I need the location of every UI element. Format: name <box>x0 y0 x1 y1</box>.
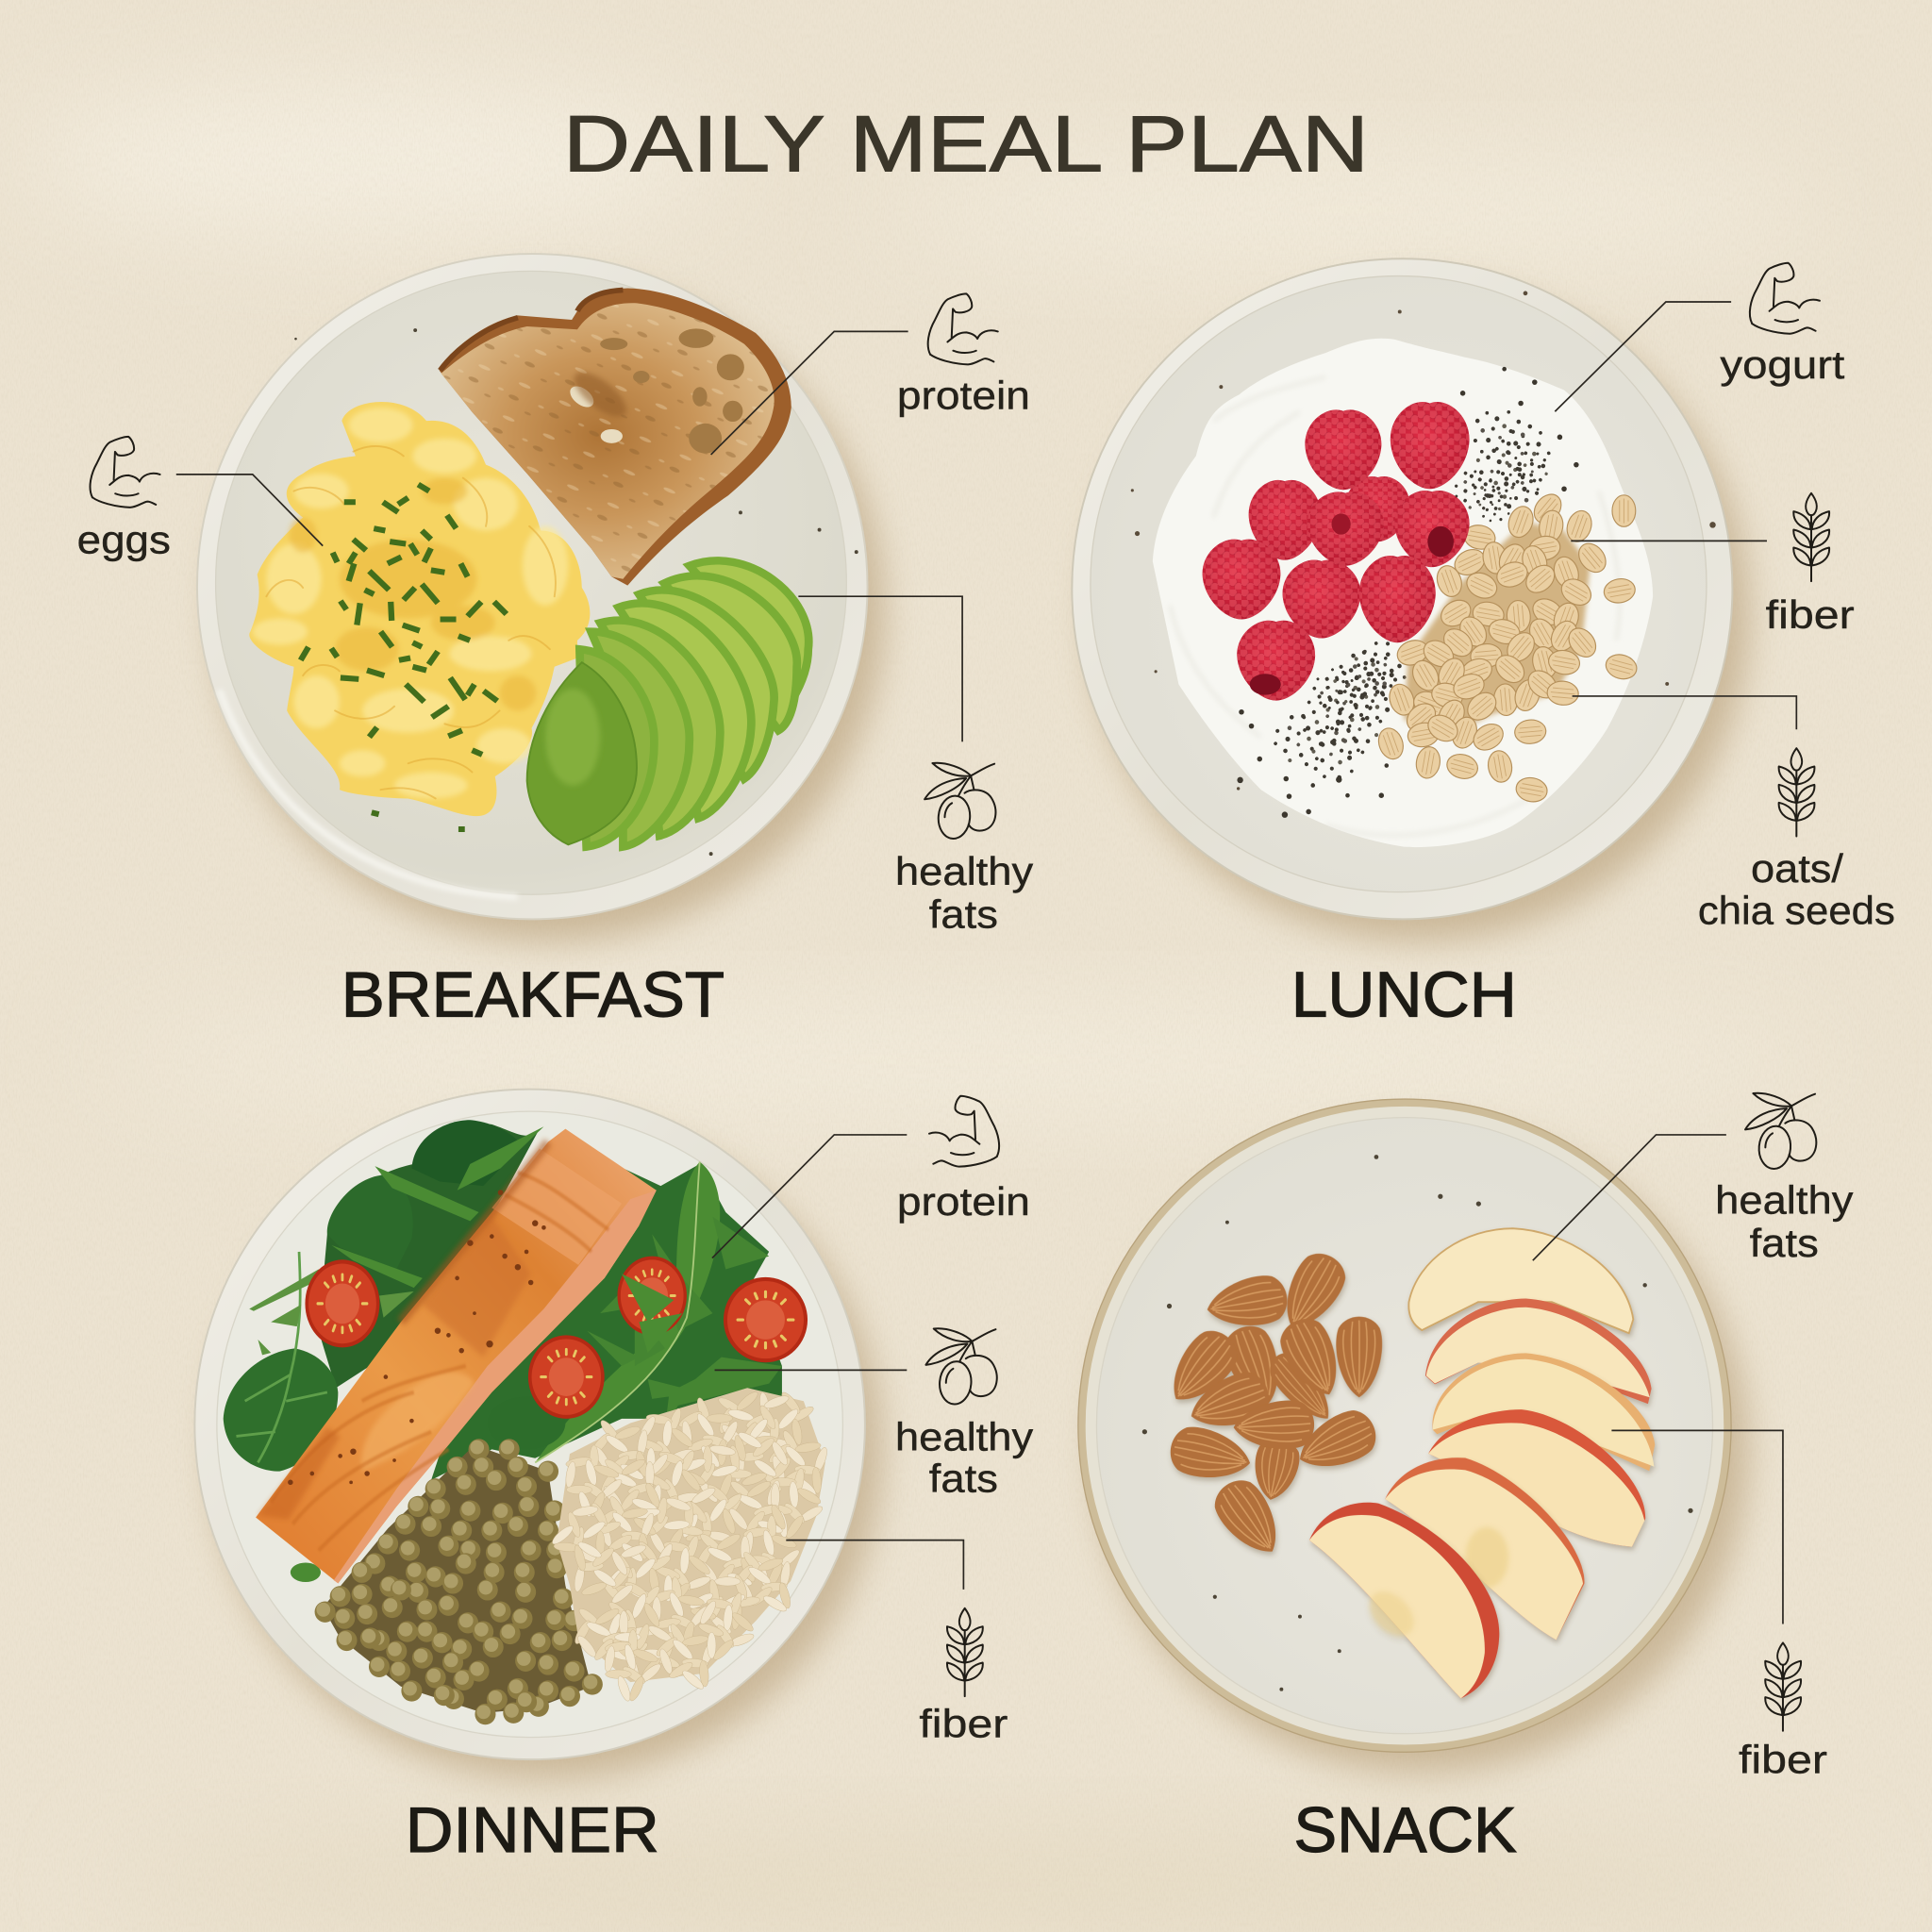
icon: muscle <box>91 437 160 508</box>
plate: dinner <box>194 1090 882 1779</box>
callout: eggs <box>77 437 323 561</box>
label: eggs <box>77 517 171 561</box>
leader line <box>1555 302 1731 411</box>
callout: oats and chia seeds <box>1573 696 1895 933</box>
plate: lunch <box>1072 258 1750 941</box>
label: fats <box>929 1457 998 1501</box>
callout: healthy fats <box>798 596 1033 937</box>
panel: dinner <box>194 1090 1033 1866</box>
food: apple slices <box>1309 1228 1655 1698</box>
leader line <box>715 1369 907 1371</box>
label: healthy <box>895 849 1033 893</box>
icon: olives <box>925 1328 997 1406</box>
food: yogurt <box>1153 339 1653 847</box>
food: scrambled eggs <box>249 402 590 829</box>
panel: breakfast <box>77 254 1033 1031</box>
callout: fiber <box>1571 493 1855 637</box>
icon: muscle <box>929 1096 999 1167</box>
icon: wheat <box>1765 1642 1801 1731</box>
icon: olives <box>924 763 995 840</box>
label: healthy <box>1715 1178 1854 1223</box>
callout: protein <box>712 1096 1030 1258</box>
heading: snack: SNACK <box>1293 1795 1517 1866</box>
label: fiber <box>919 1702 1008 1746</box>
label: chia seeds <box>1698 889 1895 933</box>
food: salad greens <box>224 1120 782 1582</box>
food: raspberries <box>1203 402 1470 701</box>
food: salmon fillet <box>256 1129 657 1583</box>
label: yogurt <box>1720 342 1845 387</box>
plate: snack <box>1078 1099 1748 1774</box>
label: fats <box>1750 1221 1819 1265</box>
food: almonds <box>1158 1245 1383 1565</box>
leader line <box>1573 696 1796 729</box>
callout: healthy fats <box>715 1328 1033 1501</box>
callout: healthy fats <box>1533 1093 1854 1265</box>
leader line <box>712 1135 907 1258</box>
label: fiber <box>1739 1738 1827 1782</box>
leader line <box>711 331 908 455</box>
icon: wheat <box>947 1608 983 1696</box>
label: fats <box>929 892 998 937</box>
icon: muscle <box>928 293 998 364</box>
callout: fiber <box>786 1541 1008 1746</box>
callout: fiber <box>1611 1430 1827 1782</box>
heading: dinner: DINNER <box>406 1795 659 1866</box>
heading: lunch: LUNCH <box>1291 960 1517 1031</box>
food: chia seeds <box>1237 367 1579 818</box>
plate: breakfast <box>197 254 885 941</box>
heading: breakfast: BREAKFAST <box>341 960 724 1031</box>
icon: wheat <box>1793 493 1829 581</box>
label: protein <box>897 374 1030 418</box>
food: tomatoes <box>305 1257 808 1419</box>
food: brown rice <box>542 1382 844 1709</box>
panel: snack <box>1078 1093 1854 1866</box>
icon: wheat <box>1779 748 1814 837</box>
food: oats <box>1374 489 1640 804</box>
label: protein <box>897 1179 1030 1224</box>
food: lentils <box>315 1439 603 1724</box>
label: oats/ <box>1751 846 1843 891</box>
leader line <box>786 1541 963 1590</box>
leader line <box>1533 1135 1726 1260</box>
callout: yogurt <box>1555 263 1845 411</box>
title: DAILY MEAL PLAN <box>563 99 1369 189</box>
leader line <box>1611 1430 1783 1624</box>
icon: muscle <box>1750 263 1820 334</box>
food: avocado slices <box>527 560 808 847</box>
leader line <box>1571 540 1767 541</box>
leader line <box>798 596 962 741</box>
leader line <box>176 475 323 546</box>
icon: olives <box>1745 1093 1816 1170</box>
label: fiber <box>1766 592 1855 637</box>
callout: protein <box>711 293 1030 455</box>
food: toast <box>440 289 791 586</box>
panel: lunch <box>1072 258 1895 1031</box>
label: healthy <box>895 1414 1033 1458</box>
